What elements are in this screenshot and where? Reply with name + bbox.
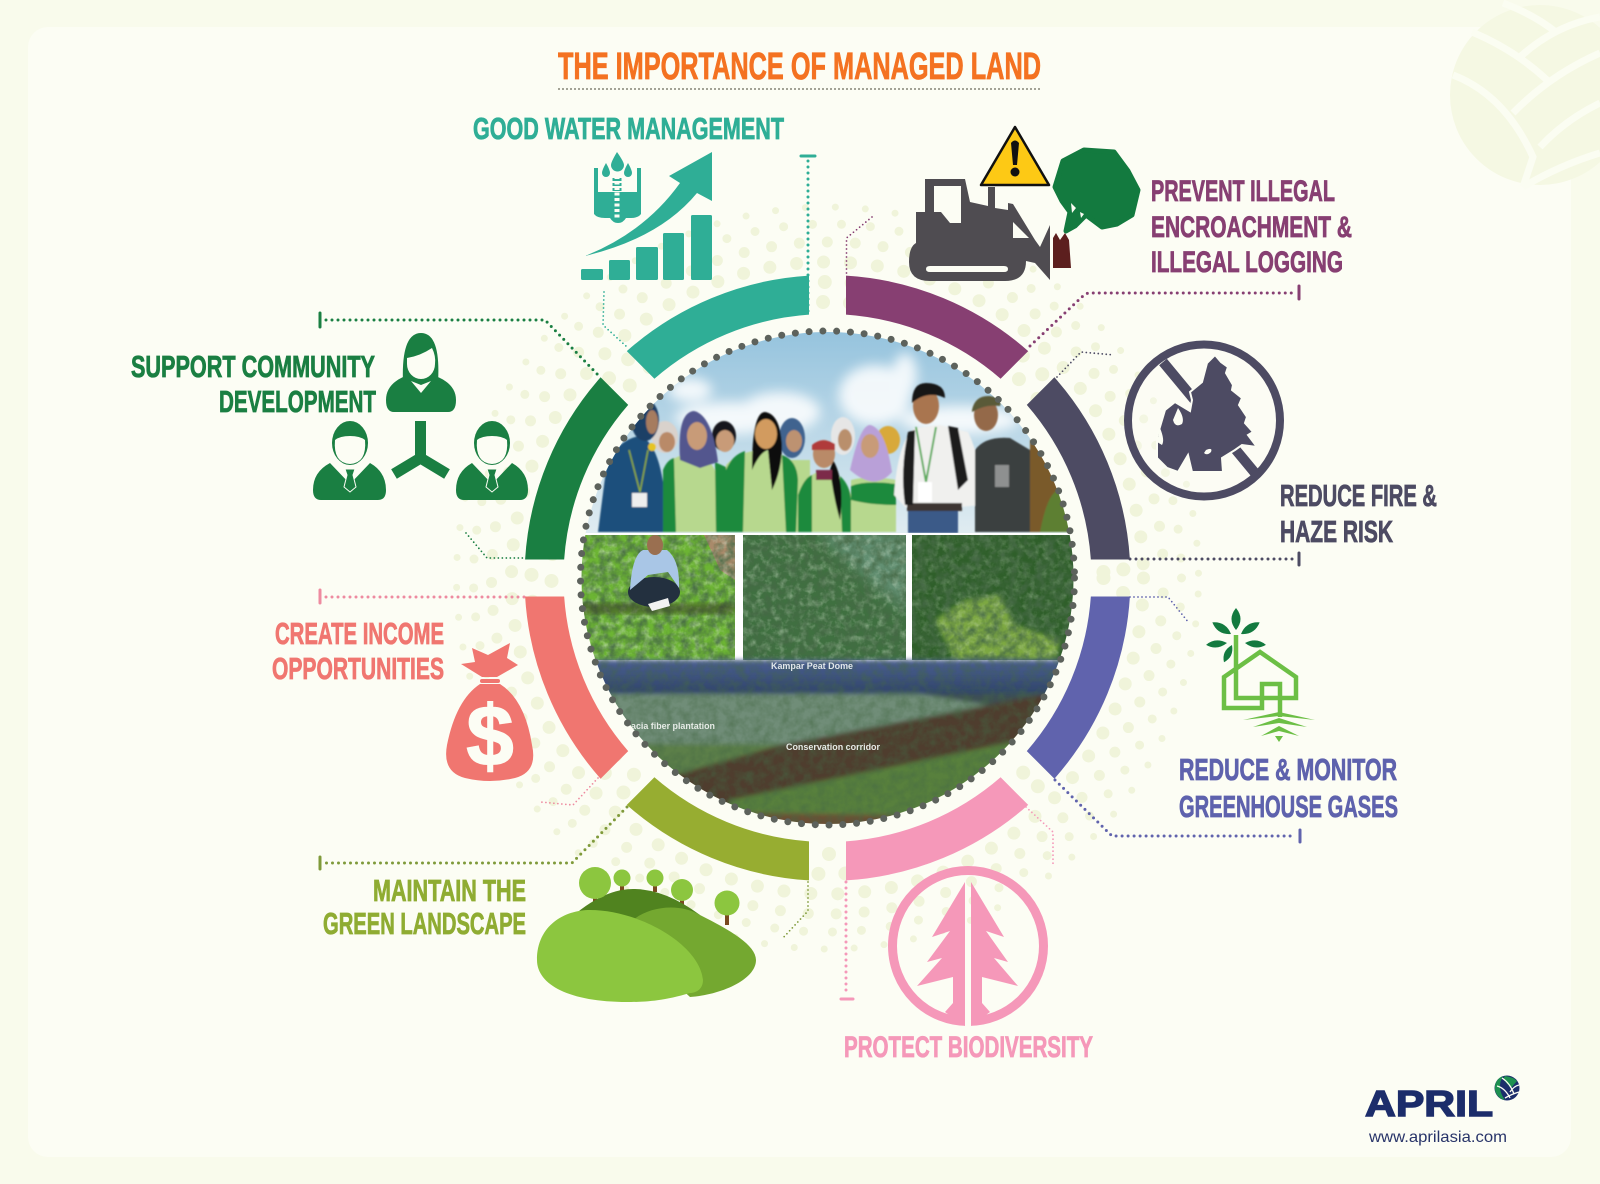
label: reduce and monitor greenhouse gases [1179,752,1398,824]
photo: forest aerial centre [743,530,910,660]
logo website: www.aprilasia.com [1368,1129,1507,1146]
label: support community development: DEVELOPMENT [219,384,376,419]
photo: forest aerial right [912,535,1082,660]
photo: community group [570,325,1085,534]
label: good water management: GOOD WATER MANAGEMENT [473,111,784,146]
label: reduce and monitor greenhouse gases: REDUCE & MONITOR [1179,752,1397,787]
photo caption: acia fiber plantation [631,721,715,732]
watermark: leaf globe [1450,3,1600,187]
logo: APRIL: APRIL [1365,1083,1493,1124]
label: create income opportunities: OPPORTUNITIES [272,651,444,686]
label: prevent illegal encroachment: ENCROACHMENT & [1151,211,1352,244]
icon: green hills and trees [537,867,756,1002]
label: maintain the green landscape: MAINTAIN THE [373,873,526,908]
photo dotted border [580,331,1074,825]
icon: money bag: $ [466,689,514,784]
photo: peat dome landscape [595,656,1059,824]
label: create income opportunities [272,616,444,686]
title: THE IMPORTANCE OF MANAGED LAND [558,46,1041,88]
label: reduce and monitor greenhouse gases: GREENHOUSE GASES [1179,789,1398,824]
icon: bulldozer, warning sign and tree [909,127,1138,281]
central photo collage [582,332,1074,824]
leader lines [320,156,1300,999]
logo: APRIL [1365,1076,1520,1146]
photo caption: Kampar Peat Dome [771,661,853,672]
label: reduce fire and haze risk: HAZE RISK [1280,514,1393,549]
label: maintain the green landscape: GREEN LANDSCAPE [323,906,526,941]
icon: protect biodiversity tree [892,870,1044,1028]
label: prevent illegal encroachment: PREVENT ILLEGAL [1151,175,1335,208]
label: create income opportunities: CREATE INCOME [275,616,444,651]
label: prevent illegal encroachment: ILLEGAL LOGGING [1151,246,1343,279]
label: reduce fire and haze risk [1280,478,1437,549]
icon: community people [313,333,528,500]
label: support community development [131,349,376,419]
icon: green house and tree [1206,608,1315,742]
label: protect biodiversity: PROTECT BIODIVERSITY [844,1031,1093,1064]
icon: no forest fire [1128,344,1280,496]
icon: money bag [446,643,533,784]
label: prevent illegal encroachment [1151,175,1352,279]
ring of eight coloured segments [525,276,1130,880]
photo: nursery worker [570,533,1085,660]
icon: water growth chart [581,152,712,280]
photo caption: Conservation corridor [786,742,880,753]
label: reduce fire and haze risk: REDUCE FIRE & [1280,478,1437,513]
label: support community development: SUPPORT COMMUNITY [131,349,375,384]
halftone dot rings [456,207,1198,949]
label: maintain the green landscape [323,873,526,941]
